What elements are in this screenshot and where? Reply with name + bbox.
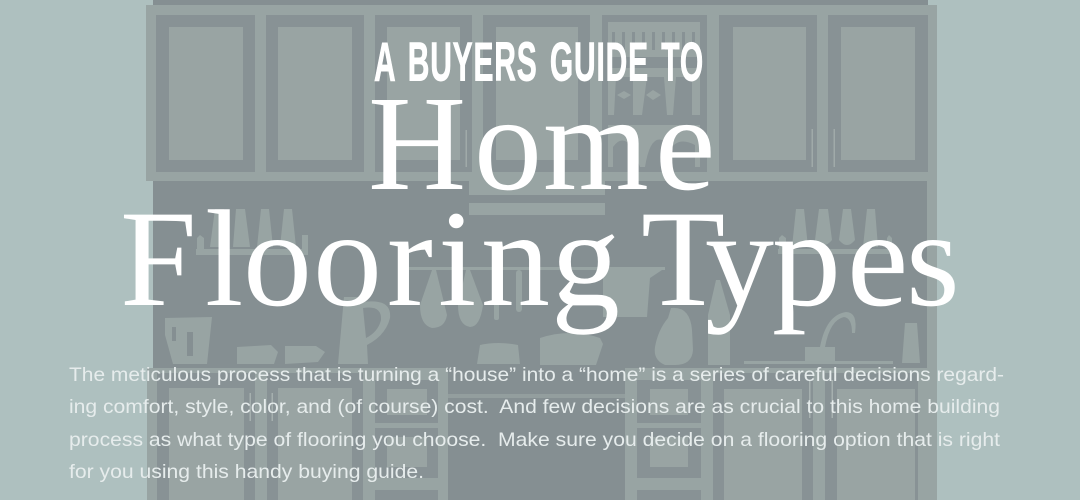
- lower cabinets: [147, 368, 937, 500]
- intro paragraph: ing comfort, style, color, and (of course) cost. And few decisions are as crucial to this home building: [69, 396, 1000, 418]
- kitchen illustration: [146, 0, 937, 500]
- left counter items: [165, 297, 520, 364]
- upper cabinets: [146, 0, 937, 181]
- right shelf with bottles: [778, 209, 892, 254]
- kicker: A Buyers Guide To: A BUYERS GUIDE TO: [374, 30, 704, 92]
- intro paragraph: process as what type of flooring you choose. Make sure you decide on a flooring option that is right: [69, 429, 1001, 451]
- oven: [448, 368, 625, 500]
- left shelf with bottles: [196, 209, 308, 255]
- intro paragraph: [69, 364, 1004, 483]
- right counter items: [540, 280, 920, 365]
- intro paragraph: The meticulous process that is turning a “house” into a “home” is a series of careful decisions regard-: [69, 364, 1004, 386]
- title line: Flooring Types: Flooring Types: [120, 182, 960, 335]
- hanging utensil rail: [407, 267, 665, 328]
- intro paragraph: for you using this handy buying guide.: [69, 461, 424, 483]
- title line: Home: Home: [368, 69, 715, 219]
- glass cabinet with dishes: [602, 15, 707, 172]
- backsplash wall: [153, 181, 937, 368]
